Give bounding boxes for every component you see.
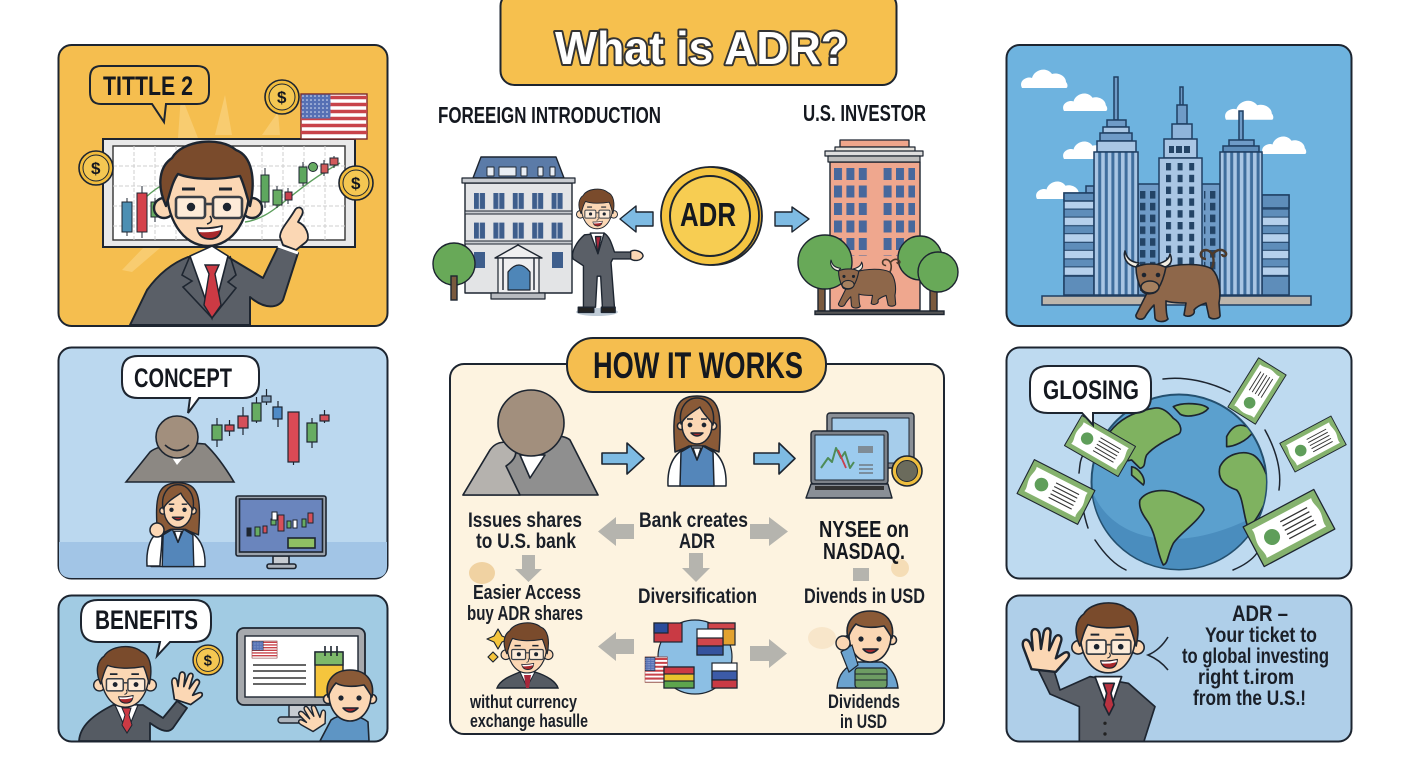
grey square connector: [853, 568, 869, 581]
text: issues shares: Issues shares: [468, 509, 582, 532]
presenter character: [130, 142, 308, 325]
speech bubble: TITTLE 2: TITTLE 2: [103, 71, 193, 101]
speech bubble: TITTLE 2: [90, 66, 209, 122]
boy at screen: [294, 670, 376, 741]
panel: benefits: [58, 596, 388, 742]
text: NYSEE on NASDAQ: NASDAQ.: [823, 538, 905, 564]
banker woman: [668, 396, 726, 486]
bull: [1124, 250, 1226, 322]
text: divends in USD: Divends in USD: [804, 585, 925, 608]
icon: coin left: $: [91, 159, 101, 178]
panel: closing globe: [1006, 348, 1352, 580]
speech bubble: CONCEPT: CONCEPT: [134, 363, 232, 393]
closing message text: right t.irom: [1198, 666, 1294, 689]
panel: how it works: [450, 338, 944, 734]
text: easier access: Easier Access: [473, 582, 581, 604]
panel: closing message: [1006, 596, 1352, 742]
grey arrow down left: [515, 555, 542, 582]
label: US investor: U.S. INVESTOR: [803, 100, 926, 126]
grey arrow right: [750, 517, 788, 546]
monitor with flag and calendar: [237, 628, 365, 723]
grey arrow lower right: [750, 639, 787, 668]
icon: coin top: [265, 80, 299, 114]
trees: [798, 235, 958, 314]
grey arrow lower left: [598, 632, 634, 661]
speech bubble: GLOSING: GLOSING: [1043, 375, 1139, 405]
icon: coin right: $: [351, 174, 361, 193]
closing message text: [1182, 601, 1329, 710]
boy with money: [836, 611, 898, 688]
closing message text: Your ticket to: [1205, 624, 1317, 647]
grey arrow down centre: [682, 553, 710, 582]
text: dividends in USD: Dividends: [828, 692, 900, 713]
chart board: [103, 139, 355, 247]
money bills: [1017, 358, 1346, 567]
coin: [193, 645, 223, 675]
text: without currency: withut currency: [469, 692, 577, 712]
grey arrow left: [598, 517, 634, 546]
icon: US flag: [301, 94, 367, 139]
speech chevron: [1148, 637, 1168, 670]
text: easier access: [467, 582, 583, 625]
speech bubble: GLOSING: [1030, 366, 1151, 425]
panel: skyline and bull: [1006, 45, 1352, 326]
laptop and monitor: [806, 413, 922, 498]
flags on globe: [645, 620, 737, 694]
text: issues shares: to U.S. bank: [476, 530, 576, 553]
foreign company building: [462, 157, 575, 299]
sparkles: [487, 629, 509, 662]
man waving: [79, 647, 206, 741]
text: issues shares: [468, 509, 582, 553]
arrow 1: [602, 443, 644, 474]
title banner: [500, 0, 896, 85]
text: bank creates ADR: ADR: [679, 530, 715, 553]
closing message text: to global investing: [1182, 645, 1329, 668]
text: diversification: Diversification: [638, 585, 757, 608]
ADR coin: [661, 167, 762, 265]
icon: coin top: $: [277, 88, 287, 107]
monitor with chart: [236, 496, 326, 568]
candlestick chart: [212, 389, 329, 465]
small man: [497, 623, 558, 688]
icon: coin left: [79, 151, 113, 185]
coin: $: [204, 652, 213, 669]
speech bubble: BENEFITS: [81, 600, 211, 656]
foreign presenter: [573, 189, 643, 316]
faceless figure: [126, 416, 234, 482]
speech bubble: CONCEPT: [122, 356, 259, 413]
text: NYSEE on NASDAQ: NYSEE on: [819, 516, 909, 542]
faceless issuer: [463, 390, 598, 495]
closing message text: from the U.S.!: [1193, 687, 1306, 710]
US office tower: [825, 140, 923, 310]
text: NYSEE on NASDAQ: [819, 516, 909, 564]
how it works pill: HOW IT WORKS: [593, 345, 803, 386]
panel: presenter with chart: [58, 45, 388, 326]
icon: coin right: [339, 166, 373, 200]
waving man: [1023, 603, 1155, 741]
panel: concept: [58, 348, 388, 578]
arrow left: [620, 206, 653, 232]
text: dividends in USD: [828, 692, 900, 733]
skyline: [1042, 77, 1311, 305]
tree left: [433, 243, 475, 300]
clouds: [1021, 70, 1306, 199]
text: without currency: [469, 692, 588, 731]
text: bank creates ADR: Bank creates: [639, 509, 748, 532]
text: easier access: buy ADR shares: [467, 603, 583, 625]
closing message text: ADR –: [1232, 601, 1288, 626]
globe: [1090, 394, 1270, 580]
motion arcs: [1079, 378, 1280, 570]
text: bank creates ADR: [639, 509, 748, 553]
text: without currency: exchange hasulle: [470, 711, 588, 731]
woman presenter: [147, 483, 205, 567]
text: dividends in USD: in USD: [840, 712, 887, 733]
label: foreign introduction: FOREEIGN INTRODUCTION: [438, 102, 661, 128]
title: What is ADR?: What is ADR?: [555, 22, 848, 74]
how it works pill: [567, 338, 826, 392]
arrow 2: [754, 443, 795, 474]
ADR coin: ADR: [680, 196, 736, 233]
arrow right: [775, 207, 809, 232]
bull small: [831, 259, 900, 308]
speech bubble: BENEFITS: BENEFITS: [95, 605, 198, 635]
